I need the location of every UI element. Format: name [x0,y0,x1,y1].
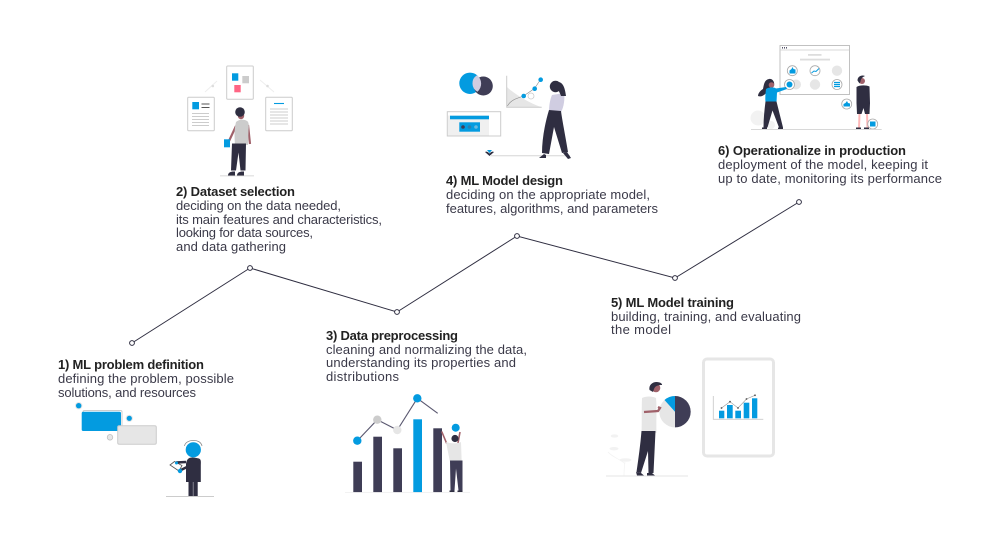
text block: step 3: 3) Data preprocessing [326,328,458,343]
text block: step 2: deciding on the data needed, [176,198,341,213]
text block: step 2: and data gathering [176,239,286,254]
text block: step 1: defining the problem, possible [58,371,234,386]
text block: step 3: understanding its properties and [326,355,516,370]
text block: step 6: up to date, monitoring its performance [718,171,942,186]
text block: step 6: 6) Operationalize in production [718,143,906,158]
text block: step 2 [176,184,382,254]
illustration: step 4 person with model diagrams [447,73,571,159]
illustration: step 3 bar chart with person [345,394,470,492]
text block: step 6 [718,143,942,186]
text block: step 4 [446,173,658,216]
text block: step 1: 1) ML problem definition [58,357,204,372]
text block: step 2: its main features and characteristics, [176,212,382,227]
illustration: step 1 person with message boxes [75,402,214,496]
text block: step 2: looking for data sources, [176,225,313,240]
text block: step 2: 2) Dataset selection [176,184,295,199]
text block: step 1 [58,357,234,400]
text block: step 5 [611,295,801,337]
text block: step 5: 5) ML Model training [611,295,734,310]
text block: step 3: cleaning and normalizing the data, [326,342,527,357]
text block: step 4: deciding on the appropriate model, [446,187,650,202]
illustration: step 6 two people with dashboard [750,46,882,129]
text block: step 5: building, training, and evaluating [611,309,801,324]
text block: step 1: solutions, and resources [58,385,196,400]
text block: step 3: distributions [326,369,400,384]
text block: step 6: deployment of the model, keeping it [718,157,928,172]
text block: step 4: 4) ML Model design [446,173,563,188]
text block: step 4: features, algorithms, and parameters [446,201,658,216]
text block: step 3 [326,328,527,384]
text block: step 5: the model [611,322,671,337]
illustration: step 5 person with pie chart and tablet [606,359,774,476]
timeline line with six points [130,200,801,345]
illustration: step 2 person with document cards [188,66,292,176]
